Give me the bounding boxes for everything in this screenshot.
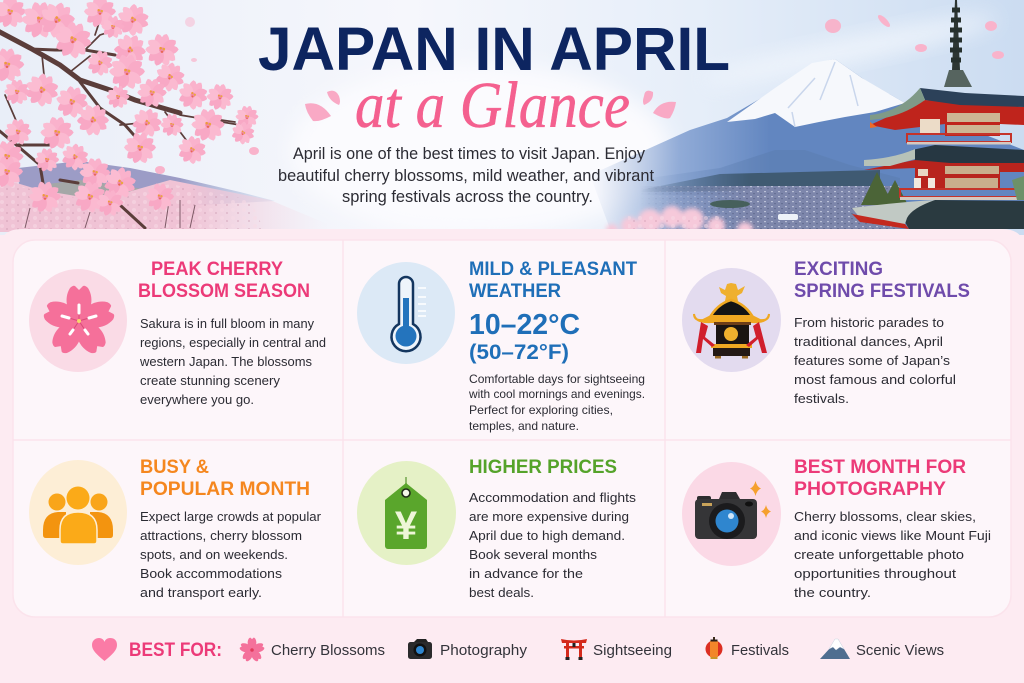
body text bbox=[140, 509, 322, 600]
body text: in advance for the bbox=[469, 566, 583, 581]
icon: lantern bbox=[706, 637, 722, 659]
icon: blossom bbox=[239, 638, 265, 663]
heading bbox=[794, 456, 966, 500]
heading bbox=[794, 258, 970, 302]
heading: SPRING FESTIVALS bbox=[794, 280, 970, 302]
icon: heart bbox=[92, 638, 117, 661]
body text: Comfortable days for sightseeing bbox=[469, 372, 645, 386]
footer: best for bbox=[92, 637, 944, 663]
icon: camera bbox=[682, 462, 781, 566]
heading: MILD & PLEASANT bbox=[469, 258, 637, 280]
panel: best month for photography bbox=[682, 456, 991, 600]
panel: exciting spring festivals bbox=[682, 258, 970, 406]
body text: everywhere you go. bbox=[140, 392, 254, 407]
body text: Sakura is in full bloom in many bbox=[140, 316, 314, 331]
temperature: (50–72°F) bbox=[469, 341, 569, 364]
cherry branches bbox=[0, 20, 240, 228]
icon: camera small bbox=[408, 639, 432, 659]
icon: crowd bbox=[29, 460, 127, 565]
panel grid bbox=[13, 240, 1011, 617]
panel: busy and popular month bbox=[29, 456, 322, 600]
mount fuji bbox=[590, 59, 1024, 229]
town and blossoms bbox=[604, 186, 900, 229]
temperature bbox=[469, 309, 580, 364]
body text: From historic parades to bbox=[794, 315, 944, 330]
body text: are more expensive during bbox=[469, 509, 629, 524]
distant hill bbox=[18, 161, 275, 205]
subtitle: at a Glance bbox=[355, 69, 630, 142]
heading: PEAK CHERRY bbox=[151, 258, 283, 280]
pagoda bbox=[852, 0, 1024, 229]
panel: higher prices bbox=[357, 456, 637, 600]
panel: mild and pleasant weather bbox=[357, 258, 645, 433]
heading bbox=[469, 258, 637, 302]
body text: Cherry blossoms, clear skies, bbox=[794, 509, 976, 524]
icon: yen price tag bbox=[357, 461, 456, 565]
body text: features some of Japan’s bbox=[794, 353, 951, 368]
icon: yen price tag: ¥ bbox=[395, 504, 418, 548]
header scene bbox=[0, 0, 1024, 238]
bottom storey bbox=[905, 200, 1024, 229]
body text: most famous and colorful bbox=[794, 372, 956, 387]
body text: spots, and on weekends. bbox=[140, 547, 288, 562]
heading: HIGHER PRICES bbox=[469, 456, 617, 478]
body text: attractions, cherry blossom bbox=[140, 528, 302, 543]
heading: BUSY & bbox=[140, 456, 209, 478]
heading: BLOSSOM SEASON bbox=[138, 280, 310, 302]
body text: temples, and nature. bbox=[469, 419, 579, 433]
heading: POPULAR MONTH bbox=[140, 478, 310, 500]
label: cherry blossoms: Cherry Blossoms bbox=[271, 642, 385, 659]
body text: festivals. bbox=[794, 391, 849, 406]
intro text: beautiful cherry blossoms, mild weather, and vibrant bbox=[278, 167, 654, 185]
body text: Perfect for exploring cities, bbox=[469, 403, 613, 417]
label: scenic views: Scenic Views bbox=[856, 642, 944, 659]
icon: torii gate bbox=[561, 639, 587, 660]
heading: WEATHER bbox=[469, 280, 561, 302]
body text: opportunities throughout bbox=[794, 566, 956, 581]
content band bbox=[0, 229, 1024, 683]
body text: traditional dances, April bbox=[794, 334, 943, 349]
temperature: 10–22°C bbox=[469, 309, 580, 341]
intro text: spring festivals across the country. bbox=[342, 188, 593, 206]
body text: Expect large crowds at popular bbox=[140, 509, 322, 524]
body text bbox=[794, 509, 991, 600]
subtitle petals right bbox=[643, 91, 676, 118]
heading: EXCITING bbox=[794, 258, 883, 280]
blossom field bbox=[0, 178, 330, 232]
body text bbox=[139, 316, 326, 407]
middle storey bbox=[864, 160, 1024, 190]
body text: with cool mornings and evenings. bbox=[468, 387, 645, 401]
label: festivals: Festivals bbox=[731, 642, 789, 659]
title: JAPAN IN APRIL bbox=[258, 15, 730, 83]
body text bbox=[794, 315, 956, 406]
falling petals bbox=[155, 13, 1004, 174]
body text: and transport early. bbox=[140, 585, 262, 600]
label: photography: Photography bbox=[440, 642, 527, 659]
trees beside pagoda bbox=[861, 172, 908, 205]
heading bbox=[138, 258, 310, 302]
subtitle petals left bbox=[305, 91, 340, 121]
body text: and iconic views like Mount Fuji bbox=[794, 528, 991, 543]
body text: April due to high demand. bbox=[469, 528, 625, 543]
body text: regions, especially in central and bbox=[140, 335, 326, 350]
label: sightseeing: Sightseeing bbox=[593, 642, 672, 659]
body text: create stunning scenery bbox=[140, 373, 280, 388]
heading: PHOTOGRAPHY bbox=[794, 478, 946, 500]
intro text bbox=[278, 145, 654, 206]
body text: create unforgettable photo bbox=[794, 547, 964, 562]
icon: thermometer bbox=[357, 262, 455, 364]
body text: the country. bbox=[794, 585, 871, 600]
panel: peak cherry blossom season bbox=[29, 258, 326, 407]
body text: western Japan. The blossoms bbox=[139, 354, 312, 369]
icon: mikoshi shrine bbox=[682, 268, 781, 372]
body text: Accommodation and flights bbox=[469, 490, 637, 505]
body text: best deals. bbox=[469, 585, 534, 600]
body text bbox=[469, 490, 637, 600]
cherry blossoms on branches bbox=[0, 0, 259, 217]
icon: cherry blossom bbox=[29, 269, 127, 372]
heading bbox=[140, 456, 310, 500]
heading: BEST MONTH FOR bbox=[794, 456, 966, 478]
best for label: BEST FOR: bbox=[129, 640, 222, 661]
body text: Book several months bbox=[469, 547, 598, 562]
body text: Book accommodations bbox=[140, 566, 283, 581]
intro text: April is one of the best times to visit Japan. Enjoy bbox=[293, 145, 646, 163]
top storey bbox=[870, 100, 1024, 136]
body text bbox=[468, 372, 645, 433]
icon: mountain bbox=[820, 639, 850, 659]
